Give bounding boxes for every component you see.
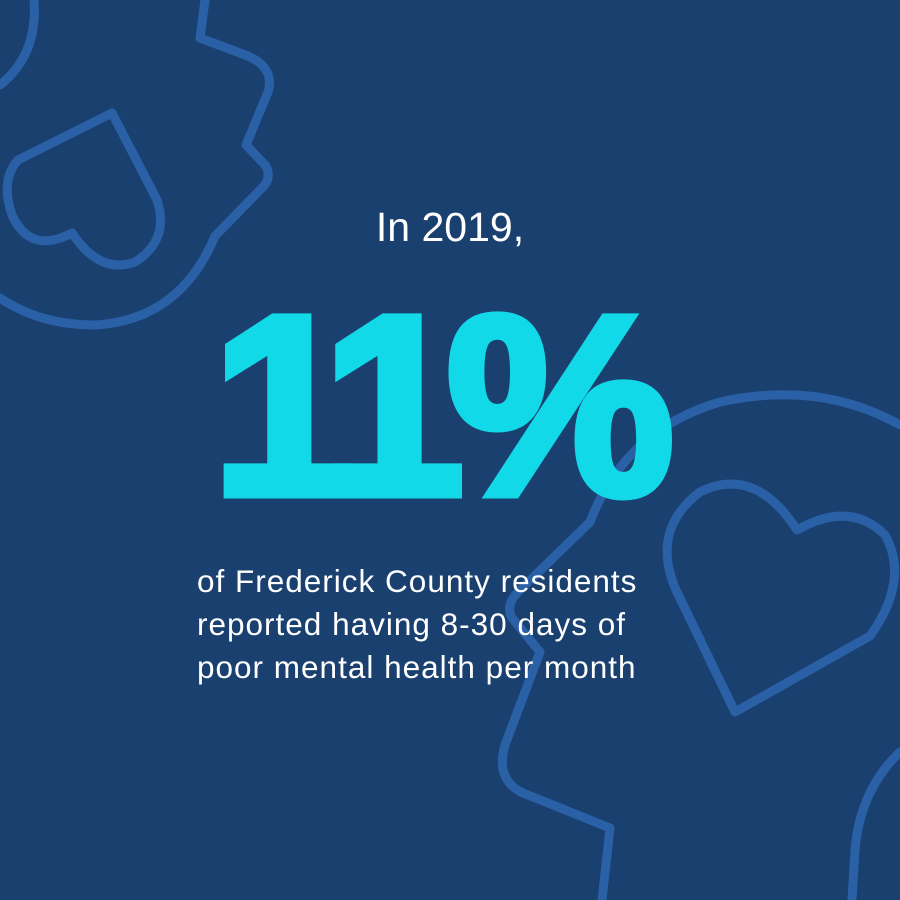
icon: bottom-right head [502, 395, 900, 900]
icon: top-left heart [7, 113, 161, 265]
heading: year: In 2019, [376, 204, 524, 250]
description text [197, 563, 637, 685]
big statistic: 11% [212, 263, 656, 549]
description text: poor mental health per month [197, 649, 636, 685]
description text: reported having 8-30 days of [197, 606, 626, 642]
description text: of Frederick County residents [197, 563, 637, 599]
icon: top-left head [0, 0, 269, 325]
icon: bottom-right heart [667, 484, 895, 712]
